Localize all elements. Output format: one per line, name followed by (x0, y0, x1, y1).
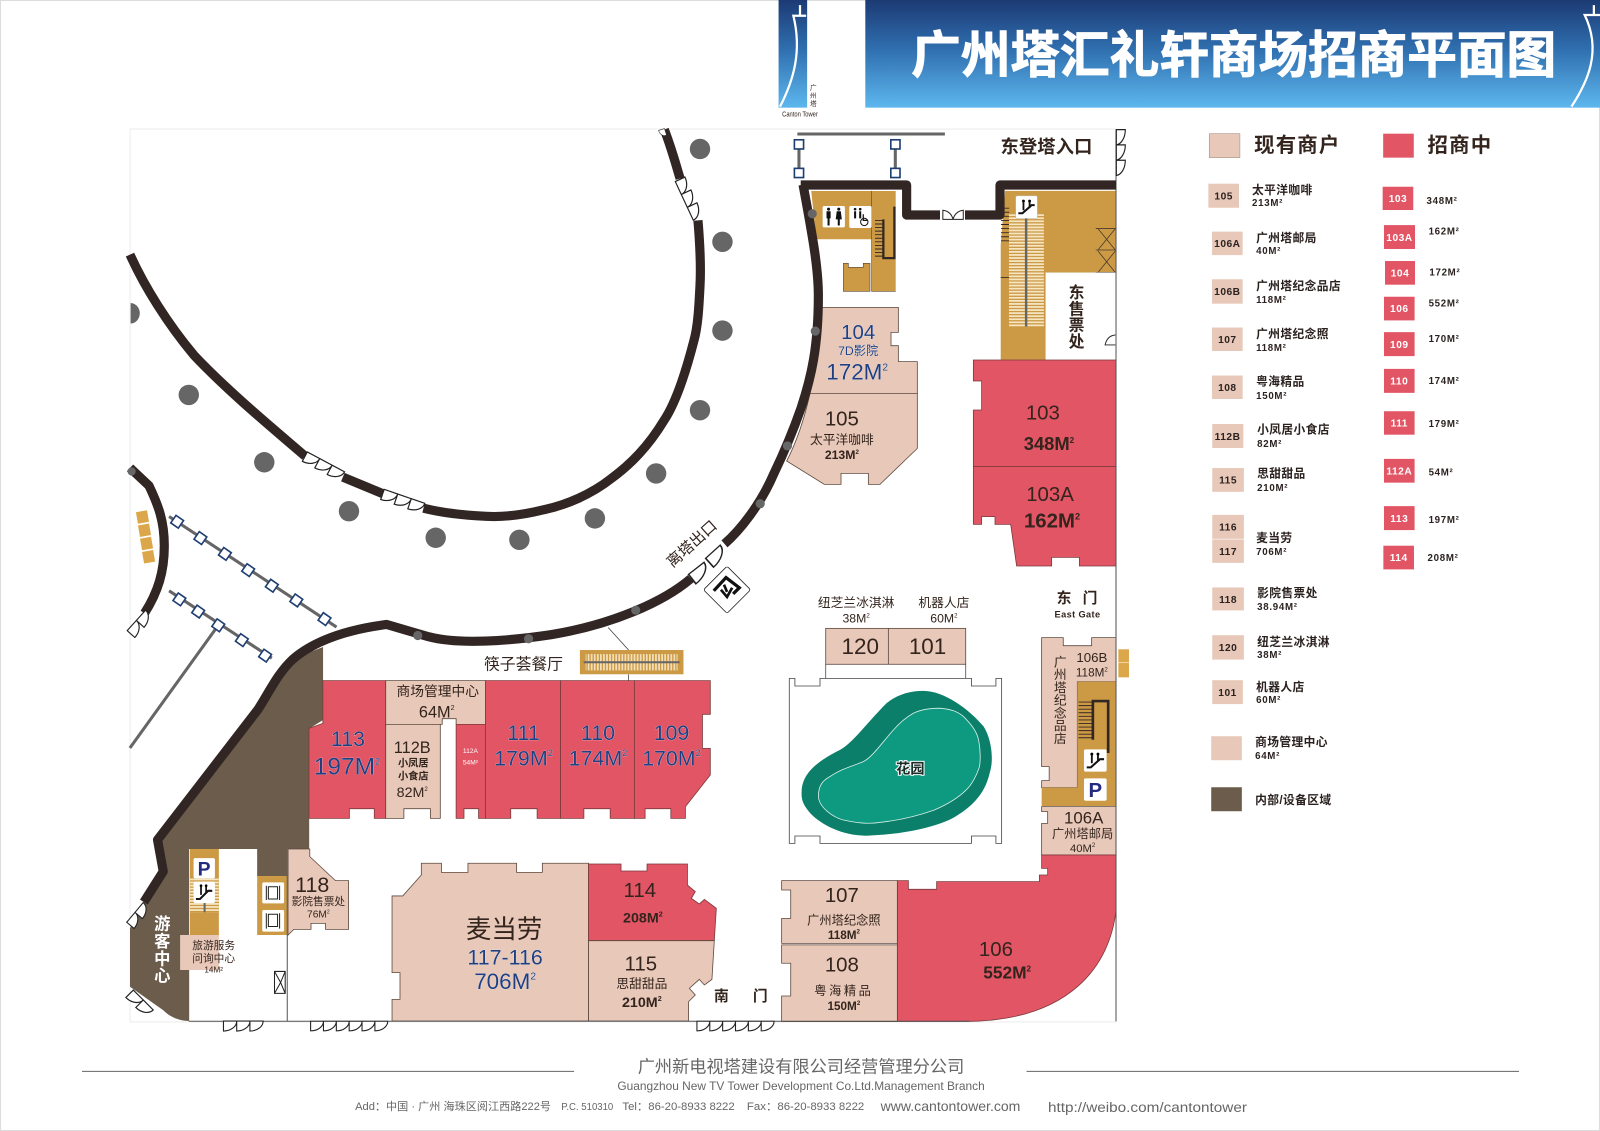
perimeter lines (189, 130, 1116, 1021)
shop 113: 197M (314, 753, 375, 780)
tourist information desk: 旅游服务 (192, 939, 235, 952)
legend row 111: 179M² (1429, 419, 1460, 430)
shop 108 (782, 945, 897, 1022)
shop 111: 179M (494, 746, 548, 770)
legend row 112A: 112A (1386, 466, 1412, 477)
shop 114: 208M (623, 910, 659, 926)
management centre: 2 (451, 704, 455, 712)
shop 104: 104 (841, 322, 875, 344)
legend row 112B (1212, 423, 1330, 450)
tourist information desk: 问询中心 (192, 952, 235, 965)
icon: escalator (1084, 749, 1107, 772)
floor plan (126, 129, 1129, 1031)
footer: http://weibo.com/cantontower (1048, 1100, 1247, 1116)
shop 113: 2 (375, 756, 380, 766)
visitor centre label: 游 (154, 915, 170, 934)
shop 107: 广州塔纪念照 (807, 912, 881, 927)
visitor centre label (154, 915, 170, 986)
shop 108: 粤海精品 (814, 983, 873, 998)
shop 117-116 McDonald's: 麦当劳 (466, 916, 542, 944)
shop 104 (810, 307, 917, 393)
south gate label: 南 (714, 988, 729, 1005)
east ticket office (1046, 273, 1116, 360)
shop 112A (456, 724, 485, 818)
legend row 103: 348M² (1427, 196, 1458, 207)
shop 117-116 McDonald's: 2 (530, 972, 536, 983)
shop 106B: 店 (1054, 731, 1067, 746)
shop 103A: 103A (1026, 484, 1074, 506)
outdoor wall and glass posts (130, 510, 337, 748)
shop 106: 552M (983, 963, 1027, 983)
shop 110: 174M (569, 746, 622, 770)
shop 103A: 162M (1024, 511, 1075, 533)
shop 114 (589, 864, 716, 941)
east gate label: East Gate (1055, 609, 1101, 619)
legend row 114 (1383, 546, 1459, 569)
visitor centre label: 客 (154, 932, 170, 951)
management centre: 64M (419, 703, 451, 721)
legend row 120: 120 (1219, 643, 1237, 654)
shop 106B: 2 (1104, 666, 1108, 673)
logo: Canton Tower: 塔 (810, 99, 817, 108)
legend row 115: 210M² (1257, 483, 1288, 494)
kiosks 120 and 101 (818, 595, 970, 678)
legend heading: existing tenants (1209, 133, 1341, 158)
shop 113: 113 (331, 727, 365, 751)
shop 110 (561, 681, 634, 818)
shop 109 (634, 681, 710, 818)
garden (789, 678, 1002, 843)
legend row 120 (1212, 635, 1330, 661)
legend: existing tenants (1208, 133, 1341, 811)
legend row 111 (1384, 411, 1460, 435)
legend row 103 (1383, 187, 1458, 210)
shop 106B: 纪 (1054, 693, 1067, 708)
footer (82, 1057, 1519, 1116)
logo: Canton Tower: 州 (810, 93, 817, 100)
icon: parking: P (1089, 780, 1102, 802)
shop 106B: 塔 (1054, 680, 1067, 695)
visitor service escalator and parking (190, 849, 219, 935)
legend row 106A (1212, 231, 1317, 257)
legend row 106 (1384, 297, 1460, 320)
shop 118: 2 (327, 909, 330, 915)
east gold core (1001, 191, 1116, 360)
legend row 103A: 162M² (1429, 227, 1460, 238)
logo: Canton Tower: Canton Tower (782, 109, 818, 118)
shop 106A: 广州塔邮局 (1052, 827, 1113, 841)
shop 106B: 念 (1054, 705, 1067, 720)
shop 113 (309, 681, 386, 818)
visitor centre label: 中 (154, 950, 170, 968)
visitor centre label: 心 (154, 968, 170, 986)
shop 112A: 54M² (463, 759, 479, 766)
shop 106: 2 (1027, 964, 1032, 973)
legend row management centre: 64M² (1255, 751, 1280, 762)
icon: restrooms (823, 206, 872, 228)
shop 106B: 品 (1054, 718, 1067, 733)
legend row 101 (1212, 680, 1305, 706)
legend heading: existing tenants: 现有商户 (1254, 133, 1341, 157)
kiosks 120 and 101: 纽芝兰冰淇淋 (818, 595, 895, 610)
shop 118: 影院售票处 (292, 895, 345, 908)
kiosks 120 and 101: 120 (841, 634, 879, 659)
legend row 112B: 小凤居小食店 (1257, 423, 1330, 437)
shop 115 (589, 941, 714, 1021)
shop 112B: 82M (397, 785, 424, 801)
legend row 118 (1212, 586, 1318, 613)
legend row 106A: 40M² (1256, 246, 1281, 257)
icon: escalator sign (1016, 196, 1037, 218)
legend row 105: 太平洋咖啡 (1252, 183, 1313, 197)
legend row 108: 粤海精品 (1256, 375, 1305, 389)
label: tower exit: 离塔出口 (664, 518, 721, 571)
kiosks 120 and 101: 2 (866, 612, 870, 619)
footer: Guangzhou New TV Tower Development Co.Ltd.Management Branch (617, 1080, 985, 1093)
shop 106A: 40M (1070, 843, 1092, 855)
legend row 120: 纽芝兰冰淇淋 (1257, 635, 1330, 649)
legend row 106B: 118M² (1256, 295, 1287, 306)
shop 117-116 McDonald's (392, 863, 589, 1021)
legend row 103A (1384, 225, 1460, 249)
shop 106A: 106A (1064, 808, 1104, 827)
legend row 113: 113 (1390, 514, 1408, 525)
shop 112B: 小食店 (398, 770, 429, 783)
shop 109: 109 (654, 721, 689, 745)
legend row 120: 38M² (1257, 650, 1282, 661)
legend row 116-117: 117 (1219, 547, 1237, 558)
elevators (257, 876, 288, 935)
shop 117-116 McDonald's: 706M (474, 969, 530, 994)
title banner: 广州塔汇礼轩商场招商平面图 (911, 27, 1556, 83)
legend row 106A: 广州塔邮局 (1256, 231, 1317, 245)
footer: 广州新电视塔建设有限公司经营管理分公司 (638, 1057, 964, 1076)
legend row 109: 170M² (1429, 334, 1460, 345)
shop 112B (386, 724, 440, 818)
legend row 114: 208M² (1428, 553, 1459, 564)
legend row management centre (1211, 735, 1328, 762)
legend row 104: 104 (1391, 269, 1409, 280)
shop 118: 76M (307, 909, 327, 920)
shop 105: 2 (855, 449, 859, 456)
legend row 111: 111 (1391, 419, 1408, 430)
shop 106A (1042, 807, 1116, 855)
legend: for lease (1383, 134, 1492, 569)
kiosks 120 and 101: 101 (909, 634, 946, 659)
legend row 108: 150M² (1256, 391, 1287, 402)
legend row 115: 115 (1219, 476, 1237, 487)
legend row 107: 118M² (1256, 343, 1287, 354)
legend row 106A: 106A (1214, 239, 1241, 250)
entrance canopy posts (794, 134, 945, 178)
legend row 103A: 103A (1386, 233, 1413, 244)
shop 103: 2 (1070, 436, 1075, 445)
footer: www.cantontower.com (880, 1099, 1020, 1115)
legend row 118: 38.94M² (1257, 602, 1298, 613)
legend row 116-117: 116 (1219, 523, 1237, 534)
footer: Add：中国 · 广州 海珠区阅江西路222号 (355, 1100, 551, 1113)
gold sign east (1118, 649, 1129, 677)
management centre (386, 681, 485, 724)
shop 115: 思甜甜品 (616, 976, 667, 991)
shop 118 (288, 849, 349, 935)
legend row 106B: 106B (1214, 287, 1241, 298)
title banner (865, 0, 1600, 108)
legend heading: for lease: 招商中 (1428, 134, 1492, 157)
legend heading: for lease (1383, 134, 1492, 158)
brown service area (130, 647, 323, 1021)
shop 106A: 2 (1092, 842, 1096, 849)
legend row 110 (1384, 369, 1460, 393)
legend row 105 (1208, 183, 1313, 209)
shop 118: 118 (295, 873, 329, 897)
tourist information desk (180, 935, 235, 974)
shop 112A: 112A (463, 748, 478, 755)
kiosks 120 and 101: 60M (930, 611, 954, 625)
shop 112B: 112B (394, 739, 431, 757)
legend row 104 (1385, 261, 1460, 285)
shop 103A: 2 (1075, 511, 1080, 521)
shop 106 (897, 855, 1116, 1021)
legend row 112B: 82M² (1257, 439, 1282, 450)
walls (130, 130, 1116, 902)
shop 107: 107 (825, 885, 859, 907)
legend row 116-117: 706M² (1256, 547, 1287, 558)
footer: Fax：86-20-8933 8222 (747, 1101, 864, 1113)
management centre: 商场管理中心 (396, 684, 479, 699)
pillars (128, 139, 820, 643)
east ticket office: 处 (1069, 333, 1085, 351)
footer: P.C. 510310 (561, 1102, 614, 1113)
legend row internal equipment area (1211, 787, 1332, 811)
legend row 112B: 112B (1215, 432, 1240, 443)
legend row 101: 60M² (1256, 695, 1281, 706)
legend row 104: 172M² (1429, 268, 1460, 279)
legend row 109 (1384, 332, 1460, 356)
kiosks 120 and 101: 2 (954, 612, 958, 619)
legend row 116-117: 麦当劳 (1256, 531, 1293, 545)
legend row 112A: 54M² (1429, 468, 1454, 479)
legend row 112A (1384, 459, 1454, 483)
icon: escalator (194, 882, 215, 903)
shop 103A (973, 467, 1116, 566)
shop 109: 2 (696, 748, 701, 758)
legend row 101: 101 (1218, 688, 1237, 699)
legend row 110: 110 (1390, 377, 1408, 388)
shop 105: 213M (825, 448, 855, 462)
legend row 108: 108 (1218, 383, 1237, 394)
shop 110: 110 (581, 721, 615, 745)
legend row 115 (1212, 467, 1306, 494)
shop 104: 2 (882, 362, 888, 373)
legend row 106: 106 (1390, 304, 1409, 315)
footer: Tel：86-20-8933 8222 (622, 1101, 735, 1113)
shop 106B: 州 (1054, 667, 1067, 682)
shop 106B: 118M (1076, 667, 1104, 680)
east ticket office: 售 (1069, 299, 1084, 318)
shop 108: 2 (857, 1000, 861, 1007)
legend row 109: 109 (1390, 340, 1409, 351)
legend row 116-117 (1212, 515, 1293, 563)
garden: 花园 (896, 759, 924, 777)
logo: Canton Tower: 广 (810, 83, 817, 92)
shop 106B (1042, 638, 1116, 788)
legend row 106: 552M² (1429, 299, 1460, 310)
kiosks 120 and 101: 38M (843, 611, 866, 625)
icon: parking: P (198, 859, 211, 881)
shop 107: 118M (828, 929, 857, 942)
shop 114: 114 (624, 880, 656, 902)
chopstick restaurant escalator (484, 628, 683, 681)
shop 108: 150M (828, 1000, 857, 1013)
shop 104: 172M (826, 360, 882, 385)
legend row 105: 105 (1214, 191, 1233, 202)
chopstick restaurant escalator: 筷子荟餐厅 (484, 655, 563, 673)
south gate label (714, 987, 768, 1005)
east gate label (1055, 589, 1101, 619)
legend row 101: 机器人店 (1256, 680, 1305, 694)
icon: exit sign (703, 566, 751, 613)
north-west service core (811, 191, 896, 291)
east gate label: 东 门 (1057, 589, 1098, 607)
shop 112B: 2 (424, 786, 428, 793)
shop 110: 2 (622, 748, 627, 758)
shop 105: 太平洋咖啡 (810, 432, 874, 447)
legend row 107 (1212, 327, 1329, 354)
legend row 105: 213M² (1252, 198, 1283, 209)
legend row 118: 影院售票处 (1257, 586, 1318, 600)
shop 114: 2 (659, 910, 663, 918)
shop 103: 348M (1024, 433, 1070, 454)
shop 103: 103 (1026, 402, 1060, 424)
shop 109: 170M (642, 746, 696, 770)
tourist information desk: 14M² (204, 965, 223, 974)
east ticket office: 东 (1069, 283, 1085, 302)
legend row 108 (1212, 375, 1305, 402)
legend row 118: 118 (1219, 595, 1237, 606)
legend row 107: 107 (1218, 335, 1237, 346)
legend row management centre: 商场管理中心 (1255, 735, 1328, 749)
shop 106: 106 (979, 939, 1013, 961)
shop 111 (485, 681, 561, 818)
shop 117-116 McDonald's: 117-116 (467, 945, 543, 969)
south gate label: 门 (753, 987, 768, 1005)
shop 115: 2 (658, 995, 662, 1003)
shop 107 (782, 881, 897, 943)
east gate stair core (1042, 682, 1116, 806)
legend row 106B: 广州塔纪念品店 (1256, 279, 1341, 293)
shop 111: 2 (548, 748, 553, 758)
legend row 113: 197M² (1429, 515, 1460, 526)
shop 105 (787, 393, 917, 484)
logo: Canton Tower (779, 0, 818, 118)
shop 106B: 106B (1076, 650, 1107, 665)
legend row 103: 103 (1389, 194, 1407, 205)
shop 112B: 小凤居 (398, 756, 429, 769)
legend row 110: 174M² (1429, 376, 1460, 387)
shop 105: 105 (825, 409, 859, 431)
shop 104: 7D影院 (838, 344, 878, 358)
legend row 114: 114 (1390, 553, 1408, 564)
kiosks 120 and 101: 机器人店 (918, 595, 970, 610)
legend row 113 (1384, 506, 1460, 530)
east ticket office: 票 (1069, 317, 1085, 335)
legend row 106B (1212, 279, 1341, 306)
shop 108: 108 (825, 954, 859, 976)
shop 115: 210M (622, 995, 658, 1011)
shop 111: 111 (507, 721, 540, 745)
legend row internal equipment area: 内部/设备区域 (1255, 793, 1332, 807)
shop 115: 115 (625, 953, 657, 975)
label: east tower entrance: 东登塔入口 (1001, 136, 1092, 157)
legend row 107: 广州塔纪念照 (1256, 327, 1329, 341)
doors (126, 129, 1125, 1031)
shop 106B: 广 (1054, 654, 1067, 669)
shop 107: 2 (857, 929, 861, 936)
shop 103 (973, 360, 1116, 467)
legend row 115: 思甜甜品 (1257, 467, 1306, 481)
